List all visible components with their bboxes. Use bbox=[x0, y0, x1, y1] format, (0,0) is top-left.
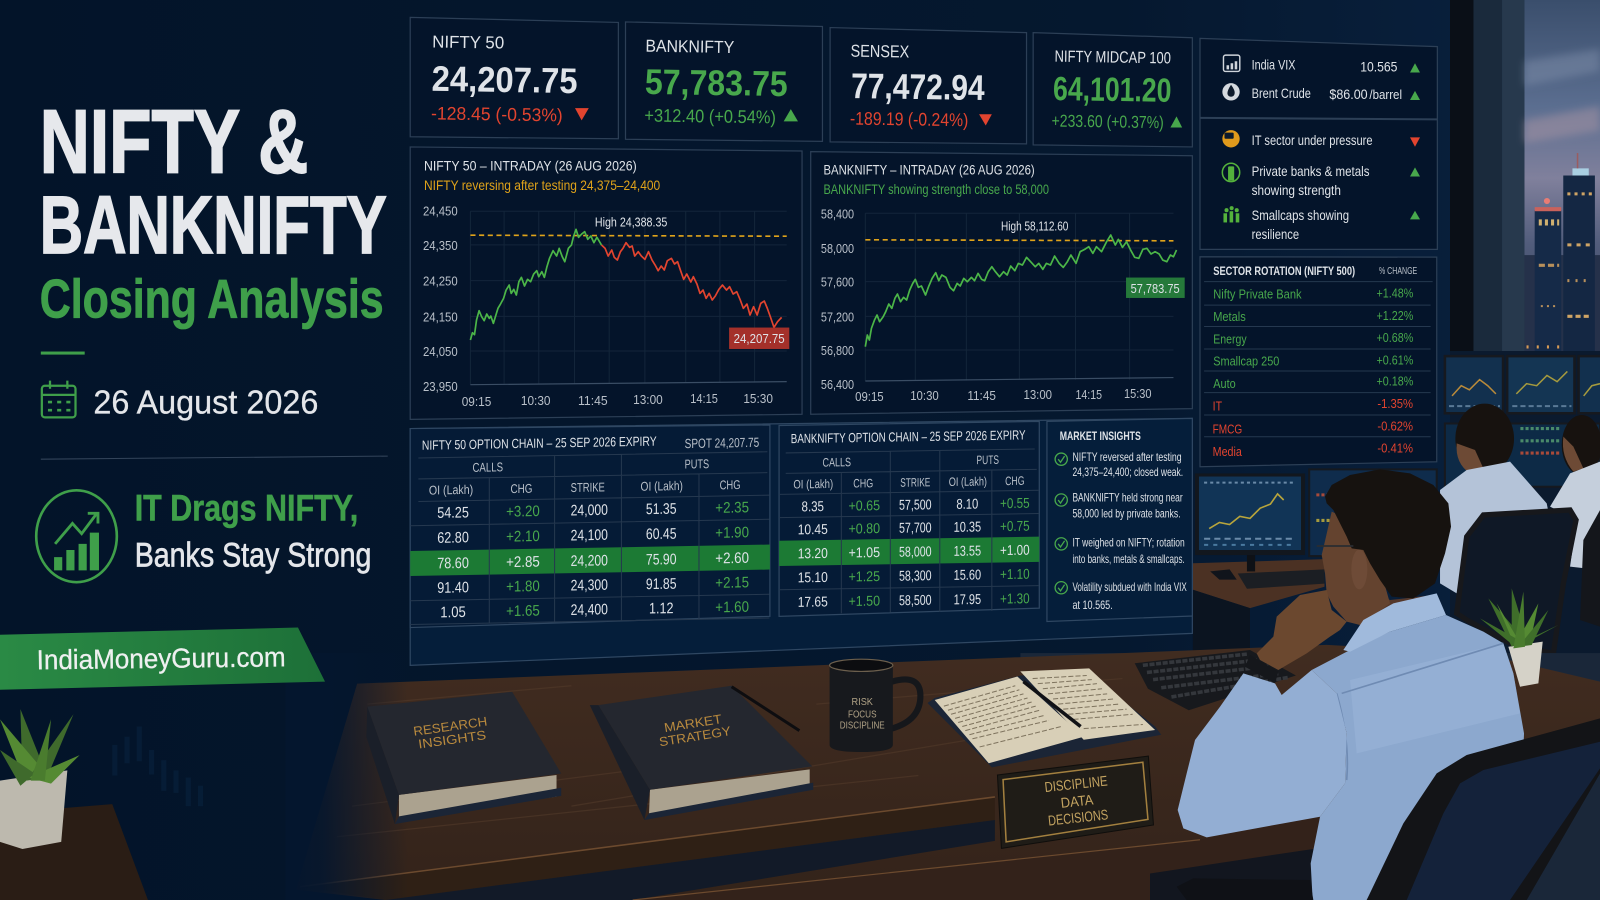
sector rows: IT bbox=[1213, 399, 1222, 414]
x axis labels: 14:15 bbox=[690, 391, 718, 406]
icon: smallcaps bbox=[1223, 206, 1239, 222]
open notebook bbox=[928, 668, 1161, 767]
glasses bbox=[1317, 544, 1353, 549]
table rows: +0.55 bbox=[1000, 496, 1030, 512]
back row monitors bbox=[1445, 356, 1600, 487]
panel: VIX, crude and market notes bbox=[1200, 38, 1437, 249]
sector rows: +0.68% bbox=[1377, 330, 1413, 345]
column headers: CHG bbox=[1005, 474, 1024, 488]
insight 3: IT weighed on NIFTY; rotation bbox=[1072, 536, 1185, 549]
panel: BANKNIFTY option chain bbox=[779, 421, 1039, 616]
row: private banks and metals bbox=[1252, 164, 1420, 199]
y axis labels: 23,950 bbox=[423, 379, 458, 394]
column headers: PUTS bbox=[977, 453, 999, 467]
row: smallcaps bbox=[1252, 208, 1420, 243]
table rows: +1.25 bbox=[848, 569, 880, 586]
neck and face bbox=[1322, 512, 1433, 627]
plaque text: DATA bbox=[1060, 792, 1095, 812]
index card: NIFTY 50 bbox=[410, 17, 618, 139]
sector rows: Media bbox=[1213, 444, 1242, 459]
book title: MARKET bbox=[663, 711, 723, 735]
chart panel: BANKNIFTY intraday bbox=[811, 152, 1192, 414]
icon: India VIX bbox=[1223, 55, 1240, 71]
index card: BANKNIFTY: 57,783.75 bbox=[645, 62, 788, 104]
table rows: +1.90 bbox=[715, 524, 749, 542]
table header: % CHANGE bbox=[1379, 266, 1417, 277]
desk plaque bbox=[997, 756, 1153, 848]
table rows: +1.60 bbox=[715, 599, 749, 616]
sector rows: -1.35% bbox=[1377, 396, 1413, 411]
watch bbox=[1245, 655, 1278, 683]
index card: NIFTY 50: NIFTY 50 bbox=[432, 31, 504, 53]
plaque text bbox=[1044, 774, 1109, 830]
title: NIFTY & bbox=[40, 92, 308, 192]
row: smallcaps: resilience bbox=[1252, 227, 1299, 243]
icon: rising market chart bbox=[36, 490, 117, 582]
table rows: 24,300 bbox=[571, 577, 608, 594]
panel: sector rotation bbox=[1200, 257, 1437, 467]
sector rows: Smallcap 250 bbox=[1213, 353, 1279, 368]
floor and main desk bbox=[286, 645, 1600, 900]
insight 3: into banks, metals & smallcaps. bbox=[1072, 553, 1185, 566]
table rows: +2.10 bbox=[506, 528, 540, 546]
book title bbox=[412, 714, 490, 752]
insight 1 bbox=[1055, 451, 1183, 479]
column headers: CALLS bbox=[472, 459, 503, 475]
column headers: CHG bbox=[510, 481, 532, 496]
table rows: +1.00 bbox=[1000, 543, 1030, 559]
table rows: +1.05 bbox=[848, 545, 880, 562]
hair bbox=[1325, 469, 1451, 598]
row: India VIX bbox=[1252, 57, 1420, 75]
table title: BANKNIFTY OPTION CHAIN – 25 SEP 2026 EXPIRY bbox=[791, 427, 1026, 446]
table rows: 51.35 bbox=[646, 501, 677, 518]
table rows: 8.10 bbox=[956, 497, 978, 513]
table rows: 13.55 bbox=[954, 543, 981, 560]
y axis labels: 58,400 bbox=[821, 206, 854, 221]
x axis labels: 11:45 bbox=[967, 388, 996, 403]
index card: NIFTY MIDCAP 100: NIFTY MIDCAP 100 bbox=[1054, 48, 1171, 67]
table rows: 75.90 bbox=[646, 551, 677, 569]
x axis labels bbox=[462, 391, 773, 409]
chart titles: NIFTY reversing after testing 24,375–24,400 bbox=[424, 178, 660, 193]
panel: market insights bbox=[1047, 418, 1192, 621]
column headers: OI (Lakh) bbox=[641, 478, 683, 494]
insight 2 bbox=[1055, 492, 1183, 520]
icon: crude drop bbox=[1222, 83, 1240, 101]
insight 3 bbox=[1055, 536, 1185, 566]
index card: BANKNIFTY bbox=[626, 22, 822, 141]
row: India VIX: India VIX bbox=[1252, 57, 1296, 73]
sector rows: +0.61% bbox=[1377, 352, 1413, 367]
row: private banks and metals: showing strength bbox=[1252, 183, 1341, 199]
index card: NIFTY MIDCAP 100 bbox=[1033, 33, 1192, 147]
website banner: IndiaMoneyGuru.com bbox=[36, 641, 286, 675]
mug text bbox=[840, 697, 885, 732]
pen bbox=[732, 687, 799, 731]
table rows: +1.50 bbox=[848, 594, 880, 610]
window with city skyline bbox=[1450, 0, 1600, 657]
table rows: 1.12 bbox=[649, 600, 673, 618]
table rows: 62.80 bbox=[437, 529, 469, 547]
table rows: +2.85 bbox=[506, 554, 540, 571]
sector rows: Auto bbox=[1213, 376, 1236, 391]
small plant on right bbox=[1480, 588, 1558, 687]
book: Market Strategy bbox=[590, 686, 813, 820]
table rows: +1.80 bbox=[506, 578, 540, 596]
icon: calendar bbox=[42, 381, 76, 417]
column headers: CHG bbox=[853, 476, 873, 491]
x axis labels: 09:15 bbox=[855, 389, 884, 404]
mug text: DISCIPLINE bbox=[840, 721, 885, 732]
book: Research Insights bbox=[366, 692, 561, 824]
table rows: 15.10 bbox=[798, 570, 828, 586]
table rows: 60.45 bbox=[646, 526, 677, 543]
price line bbox=[865, 235, 1177, 347]
table rows: 24,200 bbox=[571, 552, 608, 570]
panel: NIFTY 50 option chain bbox=[410, 425, 770, 628]
chart titles bbox=[823, 162, 1049, 197]
y axis labels bbox=[423, 203, 458, 394]
book title: INSIGHTS bbox=[417, 727, 487, 751]
index card: SENSEX: 77,472.94 bbox=[851, 66, 985, 108]
column headers bbox=[429, 455, 741, 498]
book title: RESEARCH bbox=[412, 714, 488, 739]
table rows: +3.20 bbox=[506, 503, 540, 521]
table rows: 13.20 bbox=[798, 546, 828, 562]
table rows: 54.25 bbox=[437, 504, 469, 522]
shirt bbox=[1311, 593, 1524, 900]
column headers: OI (Lakh) bbox=[429, 482, 473, 498]
table rows: 15.60 bbox=[954, 567, 981, 584]
x axis labels bbox=[855, 386, 1152, 404]
table rows: 78.60 bbox=[437, 555, 469, 572]
table rows: 24,400 bbox=[571, 601, 608, 619]
book title bbox=[656, 710, 732, 749]
keyboard bbox=[1135, 650, 1296, 710]
row: private banks and metals: Private banks & metals bbox=[1252, 164, 1369, 180]
column headers: CHG bbox=[720, 477, 741, 492]
faint candlestick backdrop bbox=[112, 727, 203, 806]
table rows: 1.05 bbox=[440, 604, 466, 621]
y axis labels: 56,400 bbox=[821, 377, 854, 392]
y axis labels: 58,000 bbox=[821, 241, 854, 256]
arm and sleeve bbox=[1178, 670, 1347, 837]
row: Brent Crude bbox=[1252, 86, 1420, 103]
row: Brent Crude: Brent Crude bbox=[1252, 86, 1311, 102]
y axis labels: 24,450 bbox=[423, 203, 458, 218]
table rows: 24,000 bbox=[571, 502, 608, 519]
insight 1: NIFTY reversed after testing bbox=[1072, 451, 1182, 464]
foreground chair bbox=[1177, 718, 1600, 900]
table rows: 57,500 bbox=[899, 497, 932, 514]
x axis labels: 14:15 bbox=[1076, 387, 1102, 402]
sector rows: Metals bbox=[1213, 309, 1246, 324]
last price tag: 24,207.75 bbox=[734, 331, 785, 346]
analyst at desk bbox=[1178, 469, 1524, 900]
high label: High 58,112.60 bbox=[1001, 219, 1068, 234]
column headers: PUTS bbox=[685, 456, 709, 472]
insight 2: BANKNIFTY held strong near bbox=[1072, 492, 1183, 505]
sector rows: +0.18% bbox=[1377, 374, 1413, 389]
column headers: OI (Lakh) bbox=[793, 477, 833, 492]
x axis labels: 13:00 bbox=[633, 392, 663, 407]
table rows: +2.60 bbox=[715, 550, 749, 567]
sector rows: Energy bbox=[1213, 331, 1247, 346]
column headers bbox=[793, 452, 1024, 492]
y axis labels: 24,250 bbox=[423, 274, 458, 289]
sector rows: Nifty Private Bank bbox=[1213, 286, 1302, 301]
price line bbox=[470, 229, 782, 340]
index card: SENSEX: SENSEX bbox=[850, 41, 910, 62]
index card: BANKNIFTY: BANKNIFTY bbox=[645, 36, 735, 57]
chart titles bbox=[424, 158, 660, 193]
mug bbox=[830, 659, 920, 752]
table rows: +1.65 bbox=[506, 603, 540, 620]
table rows: +0.80 bbox=[848, 521, 880, 538]
column headers: OI (Lakh) bbox=[949, 474, 987, 489]
sector rows: -0.62% bbox=[1377, 419, 1413, 434]
background colleagues and chair bbox=[1440, 404, 1600, 653]
index card: NIFTY 50: 24,207.75 bbox=[431, 59, 578, 101]
website banner bbox=[0, 628, 325, 690]
table rows: 57,700 bbox=[899, 520, 932, 537]
x axis labels: 09:15 bbox=[462, 394, 491, 409]
large wall panel behind option chains bbox=[410, 418, 1192, 665]
table rows: +0.75 bbox=[1000, 519, 1030, 535]
column headers: STRIKE bbox=[900, 475, 930, 490]
y axis labels: 24,350 bbox=[423, 238, 458, 253]
index card: NIFTY MIDCAP 100: +233.60 (+0.37%) bbox=[1051, 111, 1164, 132]
table rows: 91.85 bbox=[646, 576, 677, 593]
table title: SPOT 24,207.75 bbox=[685, 435, 759, 451]
index card: NIFTY 50: -128.45 (-0.53%) bbox=[431, 102, 563, 125]
table rows: +1.10 bbox=[1000, 567, 1030, 583]
index card: SENSEX: -189.19 (-0.24%) bbox=[850, 107, 969, 130]
column headers: CALLS bbox=[822, 455, 851, 470]
title: BANKNIFTY bbox=[40, 180, 387, 271]
hand bbox=[1257, 590, 1347, 670]
index card: SENSEX bbox=[830, 28, 1027, 144]
y axis labels: 24,050 bbox=[423, 344, 458, 359]
insight 2: 58,000 led by private banks. bbox=[1072, 507, 1181, 520]
table rows: +2.15 bbox=[715, 574, 749, 592]
headline: IT Drags NIFTY, bbox=[135, 487, 358, 528]
table header: SECTOR ROTATION (NIFTY 500) bbox=[1213, 265, 1355, 278]
table rows: +2.35 bbox=[715, 499, 749, 517]
last price tag: 57,783.75 bbox=[1131, 281, 1180, 296]
left table and plant bbox=[0, 709, 148, 900]
chart titles: NIFTY 50 – INTRADAY (26 AUG 2026) bbox=[424, 158, 637, 173]
row: smallcaps: Smallcaps showing bbox=[1252, 208, 1349, 224]
sector rows: FMCG bbox=[1213, 421, 1242, 436]
icon: IT sector bbox=[1222, 130, 1240, 147]
headline bbox=[135, 487, 371, 574]
y axis labels: 24,150 bbox=[423, 309, 458, 324]
y axis labels: 57,200 bbox=[821, 309, 854, 324]
table rows bbox=[798, 496, 1030, 611]
plaque text: DISCIPLINE bbox=[1044, 774, 1108, 796]
row: Brent Crude: /barrel bbox=[1369, 87, 1402, 102]
row: IT sector: IT sector under pressure bbox=[1252, 133, 1373, 149]
index card: BANKNIFTY: +312.40 (+0.54%) bbox=[644, 104, 776, 127]
insight 4: at 10.565. bbox=[1072, 599, 1113, 612]
table rows: 58,000 bbox=[899, 544, 932, 561]
insight 4 bbox=[1055, 581, 1187, 612]
row: India VIX: 10.565 bbox=[1360, 59, 1397, 75]
panel heading: MARKET INSIGHTS bbox=[1060, 430, 1141, 443]
x axis labels: 10:30 bbox=[910, 388, 939, 403]
table rows: 91.40 bbox=[437, 579, 469, 597]
table rows: 17.95 bbox=[954, 592, 981, 608]
mug text: RISK bbox=[852, 697, 873, 708]
table rows: 10.45 bbox=[798, 522, 828, 538]
y axis labels bbox=[821, 206, 854, 392]
index card: NIFTY MIDCAP 100: 64,101.20 bbox=[1053, 71, 1172, 110]
icon: private banks bbox=[1222, 163, 1240, 182]
mug text: FOCUS bbox=[848, 709, 877, 720]
insight 1: 24,375–24,400; closed weak. bbox=[1072, 466, 1183, 479]
row: Brent Crude: $86.00 bbox=[1329, 87, 1368, 103]
chart titles: BANKNIFTY showing strength close to 58,000 bbox=[823, 182, 1049, 197]
table rows: 8.35 bbox=[802, 499, 824, 515]
y axis labels: 57,600 bbox=[821, 275, 854, 290]
table rows: +0.65 bbox=[848, 498, 880, 515]
table rows: 58,500 bbox=[899, 593, 932, 609]
accent rule bbox=[41, 352, 85, 355]
x axis labels: 15:30 bbox=[743, 391, 773, 406]
notebook pen bbox=[1023, 682, 1081, 727]
column headers: STRIKE bbox=[571, 479, 605, 495]
y axis labels: 56,800 bbox=[821, 343, 854, 358]
x axis labels: 11:45 bbox=[578, 393, 608, 408]
sector rows: +1.48% bbox=[1377, 286, 1413, 301]
table rows: 17.65 bbox=[798, 594, 828, 611]
x axis labels: 15:30 bbox=[1124, 386, 1152, 401]
sector rows: -0.41% bbox=[1377, 440, 1413, 455]
sector rows bbox=[1213, 286, 1413, 459]
plaque text: DECISIONS bbox=[1047, 807, 1109, 830]
desk behind with monitors bbox=[1193, 469, 1437, 653]
last price tag bbox=[1126, 278, 1185, 298]
x axis labels: 13:00 bbox=[1023, 387, 1052, 402]
book title: STRATEGY bbox=[658, 723, 732, 749]
title: Closing Analysis bbox=[40, 267, 384, 329]
date: 26 August 2026 bbox=[93, 384, 318, 421]
sector rows: +1.22% bbox=[1377, 308, 1413, 323]
x axis labels: 10:30 bbox=[521, 393, 551, 408]
table rows: 10.35 bbox=[954, 519, 981, 536]
chart panel: NIFTY 50 intraday bbox=[410, 147, 802, 419]
headline: Banks Stay Strong bbox=[135, 536, 371, 574]
table rows: 58,300 bbox=[899, 568, 932, 585]
table title: NIFTY 50 OPTION CHAIN – 25 SEP 2026 EXPIRY bbox=[422, 434, 657, 453]
table rows: 24,100 bbox=[571, 527, 608, 544]
title bbox=[40, 92, 387, 329]
last price tag bbox=[729, 328, 789, 349]
chart titles: BANKNIFTY – INTRADAY (26 AUG 2026) bbox=[823, 162, 1035, 177]
table rows bbox=[437, 499, 749, 621]
high label: High 24,388.35 bbox=[595, 215, 667, 230]
insight 4: Volatility subdued with India VIX bbox=[1072, 581, 1187, 594]
table rows: +1.30 bbox=[1000, 591, 1030, 608]
